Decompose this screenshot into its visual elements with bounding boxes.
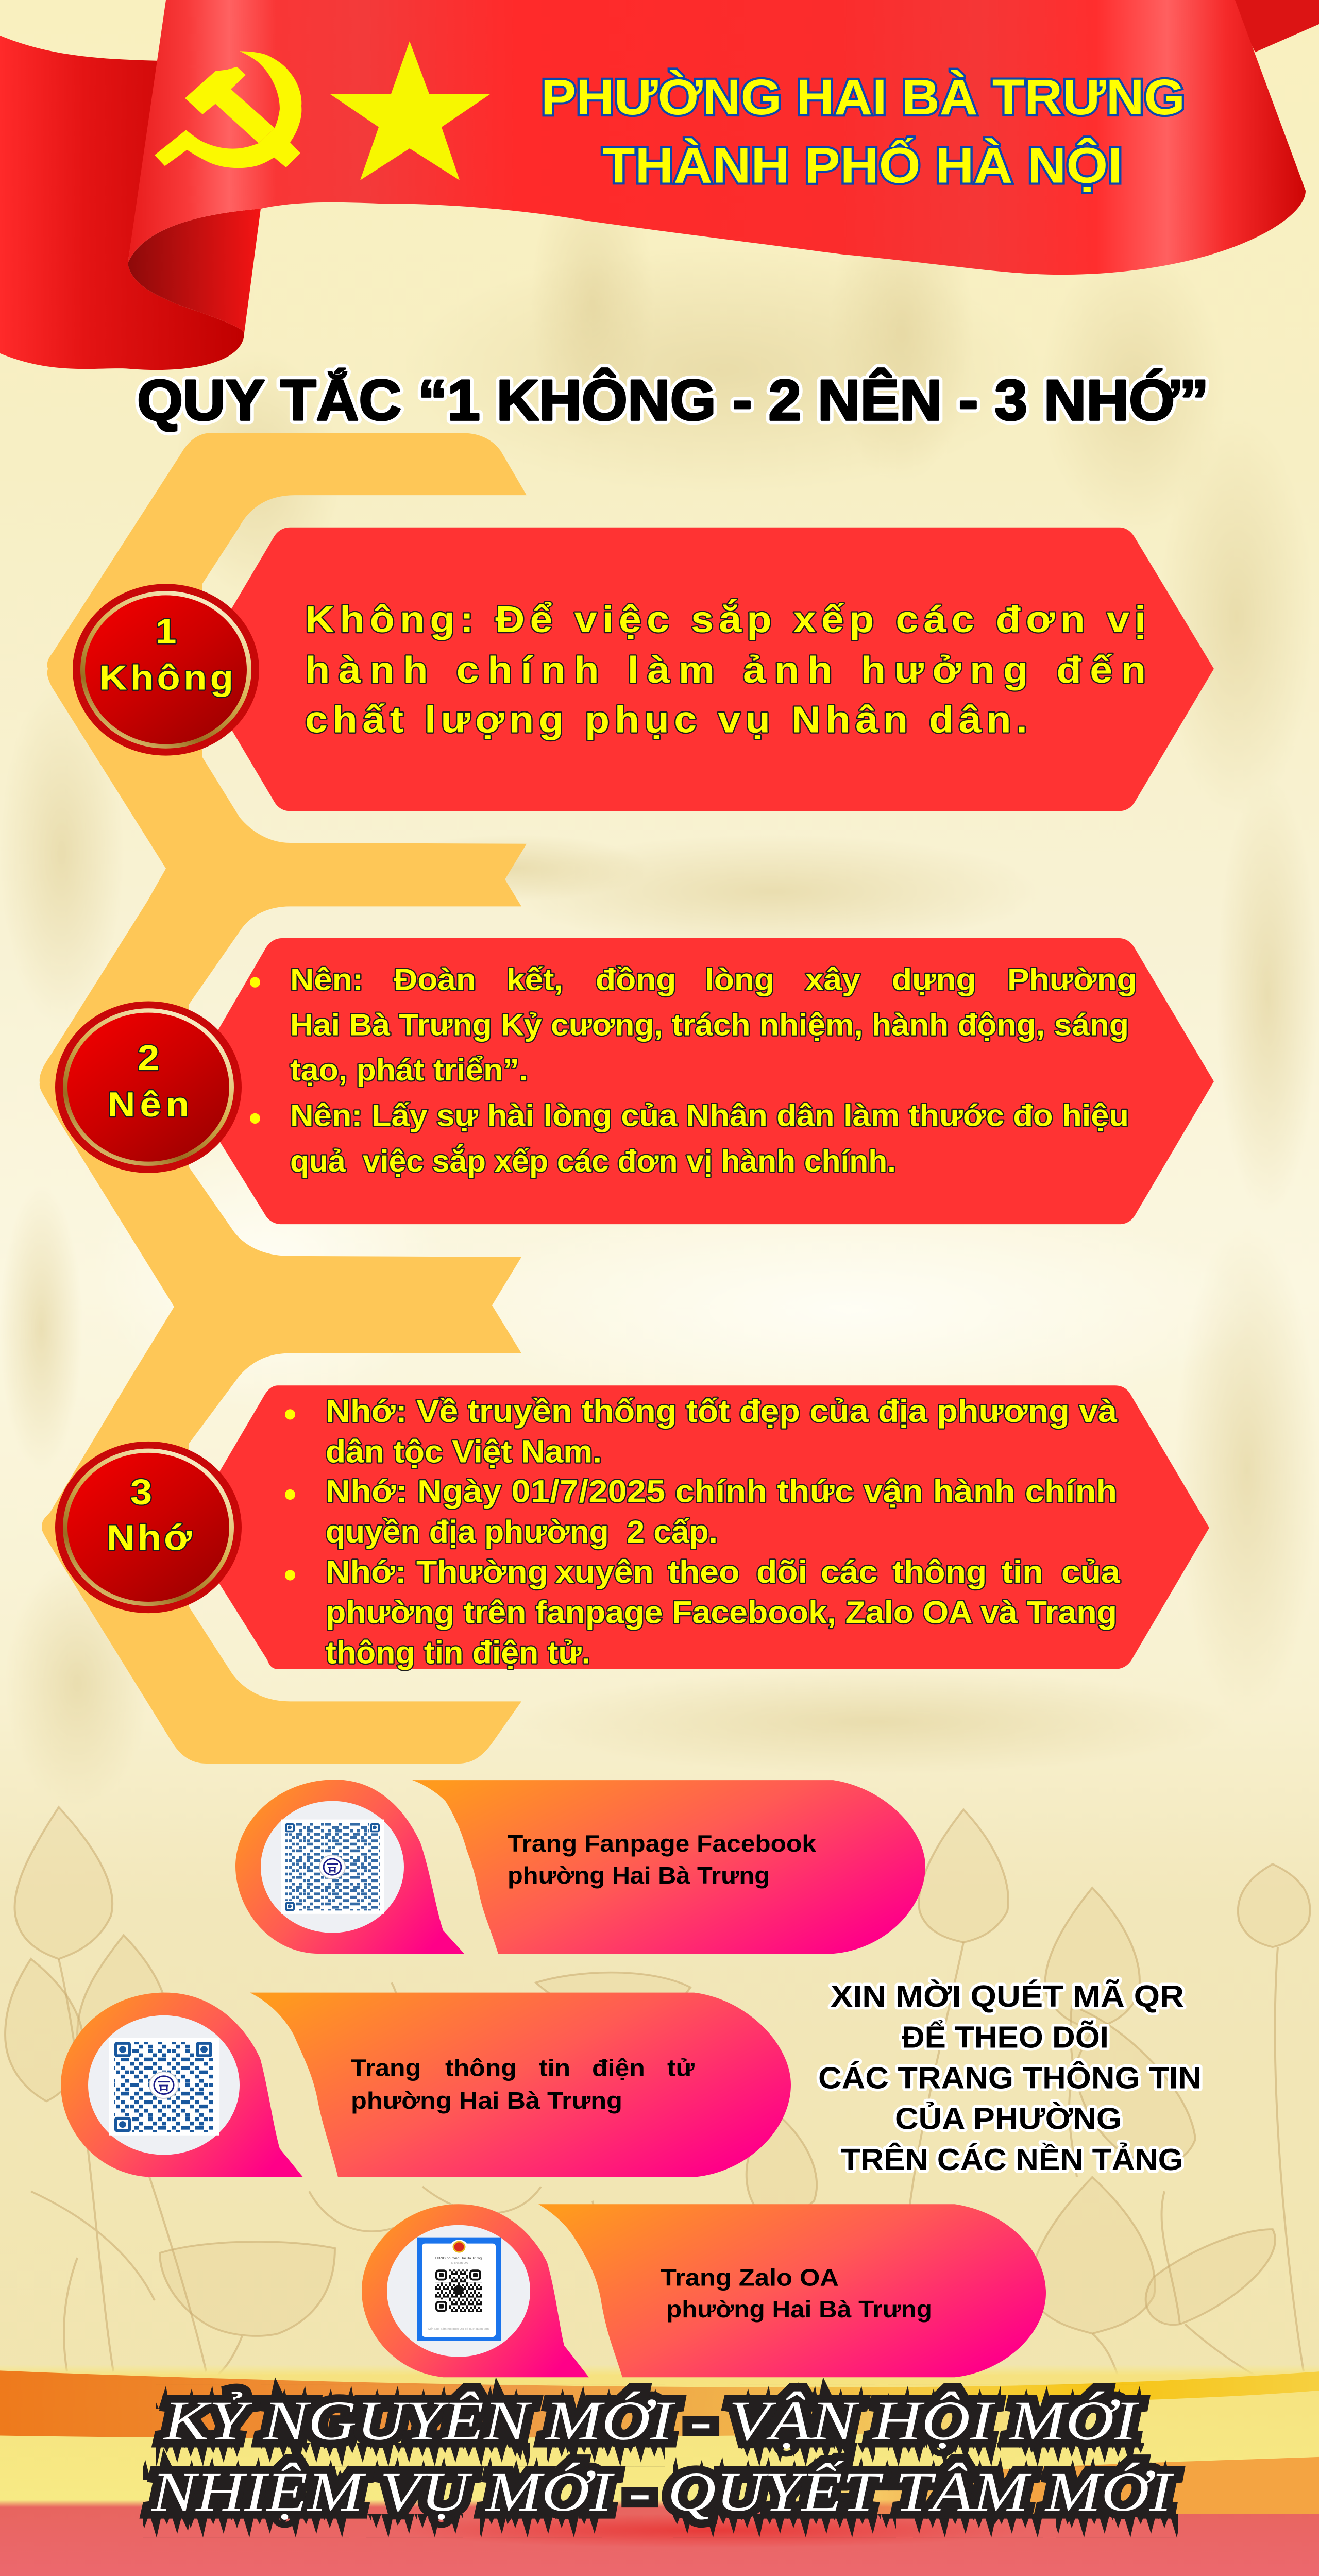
text: rule 3: phường trên fanpage Facebook, Zalo OA và Trang xyxy=(326,1596,1117,1630)
badge 3: 3 xyxy=(130,1472,152,1512)
text: rule 3: Nhớ: Ngày 01/7/2025 chính thức vận hành chính xyxy=(326,1475,1117,1509)
badge 2: Nên xyxy=(108,1086,189,1125)
main heading: QUY TẮC “1 KHÔNG - 2 NÊN - 3 NHỚ” xyxy=(137,367,1209,432)
ribbon 3 xyxy=(538,2204,1046,2377)
flag: top right piece xyxy=(1229,0,1319,52)
text: rule 2: Nên: Lấy sự hài lòng của Nhân dân làm thước đo hiệu xyxy=(290,1099,1129,1133)
slogan spikes xyxy=(143,2385,1178,2537)
panel: step 1 xyxy=(73,528,1214,811)
badge 3 xyxy=(55,1442,242,1613)
banner flag xyxy=(0,0,1319,370)
panel: step 2 xyxy=(55,938,1214,1224)
text: rule 3: thông tin điện tử. xyxy=(326,1636,590,1670)
teardrop 1 xyxy=(235,1780,464,1954)
text: rule 3: theo xyxy=(668,1555,739,1590)
text: rule 3: dân tộc Việt Nam. xyxy=(326,1435,602,1469)
label 1: phường Hai Bà Trưng xyxy=(508,1863,770,1889)
text: rule 2: đồng xyxy=(596,963,676,997)
QR invitation text xyxy=(818,1980,1202,2177)
text: rule 2: Hai Bà Trưng Kỷ cương, trách nhiệm, hành động, sáng xyxy=(290,1008,1129,1042)
label 3: Trang Zalo OA xyxy=(661,2265,839,2291)
icon: hammer and sickle xyxy=(155,51,301,168)
teardrop 3 xyxy=(362,2204,589,2377)
QR invitation text: XIN MỜI QUÉT MÃ QR xyxy=(831,1980,1184,2014)
Zalo QR card: Tài khoản OA xyxy=(449,2262,468,2265)
Zalo QR card: UBND phường Hai Bà Trưng xyxy=(435,2257,482,2260)
badge 1 xyxy=(73,584,259,756)
text: rule 3: các xyxy=(821,1555,877,1590)
QR invitation text: ĐỂ THEO DÕI xyxy=(902,2021,1109,2055)
label 2 xyxy=(351,2055,695,2114)
label 3: phường Hai Bà Trưng xyxy=(666,2297,932,2323)
QR invitation text: CÁC TRANG THÔNG TIN xyxy=(818,2061,1202,2095)
flag: inner fold shadow xyxy=(128,209,261,333)
main heading: QUY TẮC “1 KHÔNG - 2 NÊN - 3 NHỚ” xyxy=(137,367,1209,432)
badge 2 xyxy=(55,1001,242,1173)
label 1: Trang Fanpage Facebook xyxy=(508,1831,816,1857)
label 2: tử xyxy=(667,2055,695,2081)
Zalo QR card: Mở Zalo bấm nút quét QR để quét quan tâm xyxy=(428,2327,489,2331)
text: rule 3: thông xyxy=(892,1555,987,1590)
flag: main body xyxy=(128,0,1306,275)
Zalo QR card xyxy=(417,2238,501,2341)
text: rule 2: Phường xyxy=(1007,963,1137,997)
QR block: website xyxy=(61,1993,791,2177)
QR invitation text: TRÊN CÁC NỀN TẢNG xyxy=(841,2143,1183,2177)
text: rule 2 xyxy=(250,963,1137,1178)
banner title: THÀNH PHỐ HÀ NỘI xyxy=(602,137,1123,194)
text: rule 1 xyxy=(305,599,1146,741)
label 3 xyxy=(661,2265,932,2323)
text: rule 3: của xyxy=(1061,1555,1120,1590)
text: rule 2: dựng xyxy=(892,963,976,997)
red panel 1 xyxy=(196,528,1214,811)
text: rule 2: lòng xyxy=(705,963,774,997)
label 2: tin xyxy=(539,2055,570,2081)
text: rule 2: kết, xyxy=(506,963,563,997)
label 2: Trang xyxy=(351,2055,421,2081)
label 2: điện xyxy=(592,2055,645,2081)
label 2: phường Hai Bà Trưng xyxy=(351,2088,622,2114)
yellow connector xyxy=(40,433,527,1764)
text: rule 3: quyền địa phường 2 cấp. xyxy=(326,1515,718,1549)
text: rule 2: Nên: xyxy=(290,963,363,997)
slogan text: NHIỆM VỤ MỚI - QUYẾT TÂM MỚI xyxy=(151,2460,1175,2523)
text: rule 3: tin xyxy=(1002,1555,1043,1590)
banner title: PHƯỜNG HAI BÀ TRƯNG xyxy=(541,69,1185,125)
background: lotus line art xyxy=(5,1802,1310,2376)
badge 2: 2 xyxy=(138,1038,159,1078)
text: rule 3: dõi xyxy=(756,1555,807,1590)
badge 1: Không xyxy=(99,658,233,698)
QR block: Zalo xyxy=(362,2204,1046,2377)
text: rule 1: hành chính làm ảnh hưởng đến xyxy=(305,649,1146,691)
flag: left fold xyxy=(0,36,244,370)
QR block: Facebook xyxy=(235,1780,925,1954)
badge 3: Nhớ xyxy=(107,1518,192,1558)
text: rule 3: Thường xyxy=(416,1555,548,1590)
text: rule 1: chất lượng phục vụ Nhân dân. xyxy=(305,699,1027,741)
QR code 1 xyxy=(281,1820,384,1914)
text: rule 3 xyxy=(285,1394,1120,1670)
text: rule 3: xuyên xyxy=(555,1555,654,1590)
text: rule 1: Không: Để việc sắp xếp các đơn vị xyxy=(305,599,1146,640)
red panel 3 xyxy=(185,1385,1209,1669)
footer slogan xyxy=(143,2385,1178,2537)
banner title xyxy=(541,69,1185,194)
red panel 2 xyxy=(185,938,1214,1224)
ribbon 2 xyxy=(250,1993,791,2177)
text: rule 2: quả việc sắp xếp các đơn vị hành chính. xyxy=(290,1144,896,1178)
slogan text xyxy=(151,2389,1175,2523)
background: bottom colour band xyxy=(0,2364,1319,2576)
text: rule 2: Đoàn xyxy=(394,963,476,997)
text: rule 2: tạo, phát triển”. xyxy=(290,1054,528,1088)
QR invitation text: CỦA PHƯỜNG xyxy=(895,2102,1122,2136)
icon: yellow star xyxy=(330,41,491,180)
label 1 xyxy=(508,1831,816,1889)
badge 1: 1 xyxy=(155,612,177,651)
QR code 2 xyxy=(109,2038,219,2136)
label 2: thông xyxy=(445,2055,517,2081)
teardrop 2 xyxy=(61,1993,303,2177)
ribbon 1 xyxy=(412,1780,925,1954)
text: rule 2: xây xyxy=(805,963,860,997)
text: rule 3: Nhớ: Về truyền thống tốt đẹp của địa phương và xyxy=(326,1394,1118,1429)
slogan text: KỶ NGUYÊN MỚI - VẬN HỘI MỚI xyxy=(163,2389,1140,2452)
panel: step 3 xyxy=(55,1385,1209,1670)
text: rule 3: Nhớ: xyxy=(326,1555,407,1590)
